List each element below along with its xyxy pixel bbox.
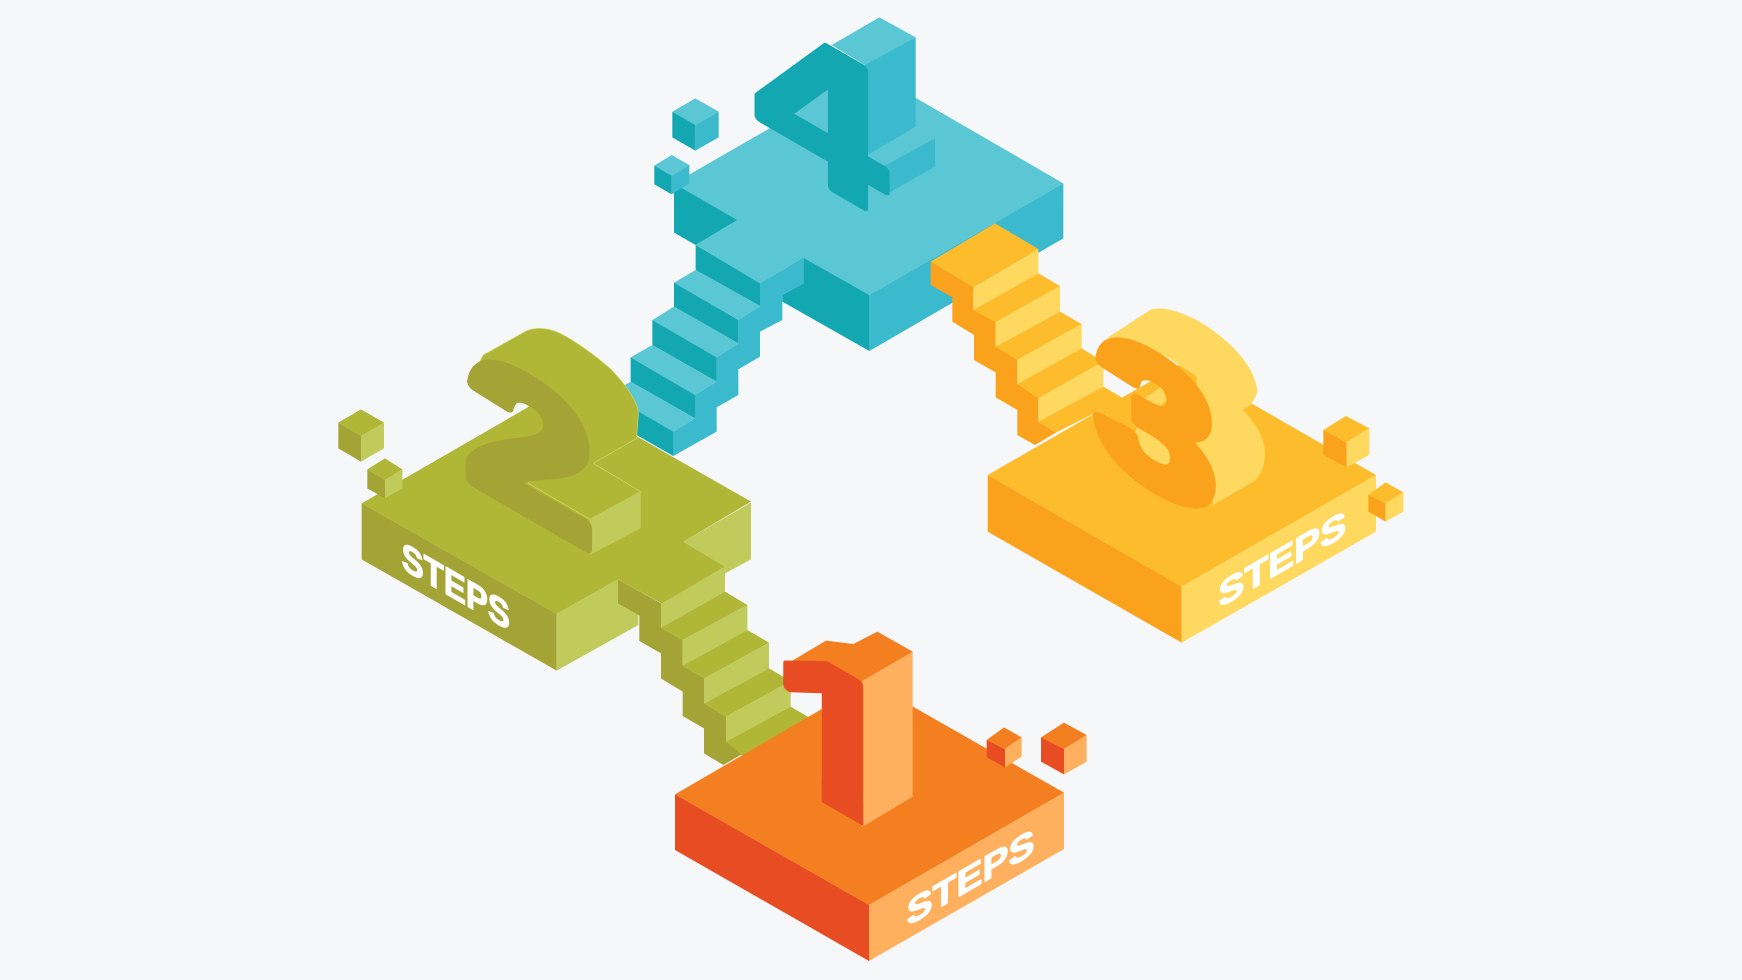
green staircase	[618, 567, 813, 765]
icon: small orange cube	[987, 727, 1022, 767]
blue platform	[674, 71, 1063, 351]
panel: step 3 yellow	[931, 223, 1403, 643]
yellow staircase	[931, 223, 1123, 445]
panel: step 4 blue	[609, 0, 1063, 456]
blue staircase	[609, 245, 803, 456]
panel: step 1 orange	[675, 632, 1087, 961]
green platform	[362, 391, 751, 671]
icon: small green cube	[367, 458, 402, 498]
orange platform	[675, 682, 1064, 961]
yellow platform	[988, 363, 1376, 643]
icon: small blue cube	[654, 155, 689, 194]
icon: large blue cube	[672, 98, 719, 151]
icon: large orange cube	[1041, 723, 1087, 774]
panel: step 2 green	[338, 302, 813, 765]
number 1: 1	[772, 589, 902, 892]
label: steps on green platform: STEPS	[402, 534, 510, 640]
icon: large yellow cube	[1323, 416, 1369, 467]
icon: large green cube	[338, 409, 384, 462]
label: steps on orange platform: STEPS	[907, 820, 1035, 935]
number 2: 2	[465, 302, 594, 592]
number 3: 3	[1095, 284, 1216, 560]
infographic: four isometric steps	[338, 17, 1404, 961]
label: steps on yellow platform: STEPS	[1218, 502, 1346, 616]
icon: small yellow cube	[1368, 482, 1403, 522]
number 1	[783, 632, 913, 827]
